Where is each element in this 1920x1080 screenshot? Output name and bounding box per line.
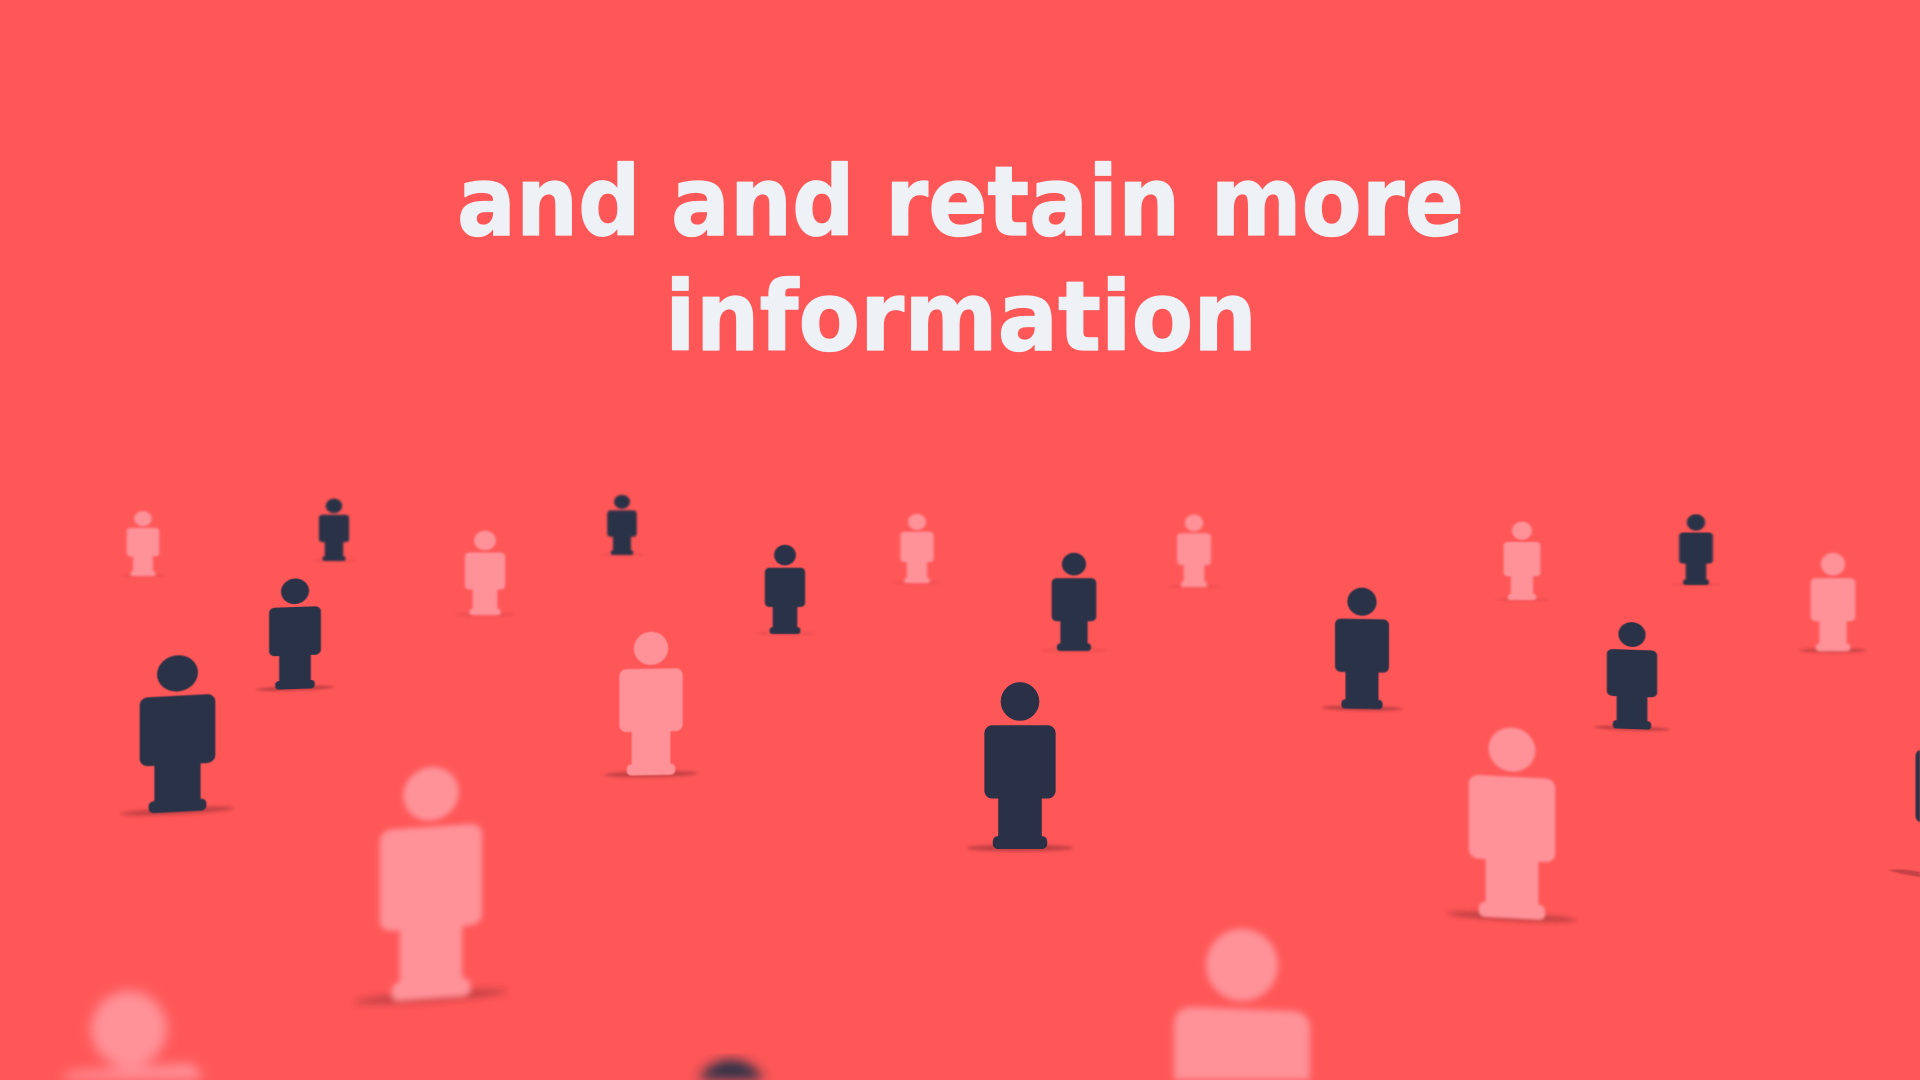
figure: dark bottom edge — [698, 1060, 764, 1080]
figure: far dark centre-left — [600, 495, 644, 556]
figure: dark left upper — [256, 577, 334, 692]
figure: far pink centre-right — [1169, 515, 1219, 588]
figure: dark cut off at right edge — [1888, 750, 1920, 877]
figure: mid pink far right — [1800, 553, 1866, 652]
title: information — [665, 261, 1257, 373]
title: and and retain more — [457, 146, 1464, 258]
figure: mid pink left — [455, 531, 515, 616]
figure: far pink right — [1494, 522, 1550, 601]
figure: dark front left — [121, 652, 234, 817]
figure: far pink centre — [892, 514, 942, 584]
title — [457, 146, 1464, 373]
figure: mid dark centre-left — [755, 545, 815, 635]
figure: pink front left — [354, 762, 508, 1007]
figure: dark front centre — [967, 682, 1073, 851]
figure: pink bottom left — [62, 991, 202, 1080]
figure: pink centre-left — [603, 631, 699, 778]
figure: mid dark centre — [1041, 553, 1107, 652]
figure: far pink left — [119, 511, 167, 577]
figure: pink bottom centre — [1174, 929, 1310, 1080]
figure: far dark right — [1671, 514, 1721, 586]
figure: pink front right — [1447, 724, 1577, 924]
figure: dark centre-right — [1322, 587, 1402, 712]
figure: dark right — [1594, 621, 1670, 732]
figure: far dark left — [311, 499, 357, 562]
